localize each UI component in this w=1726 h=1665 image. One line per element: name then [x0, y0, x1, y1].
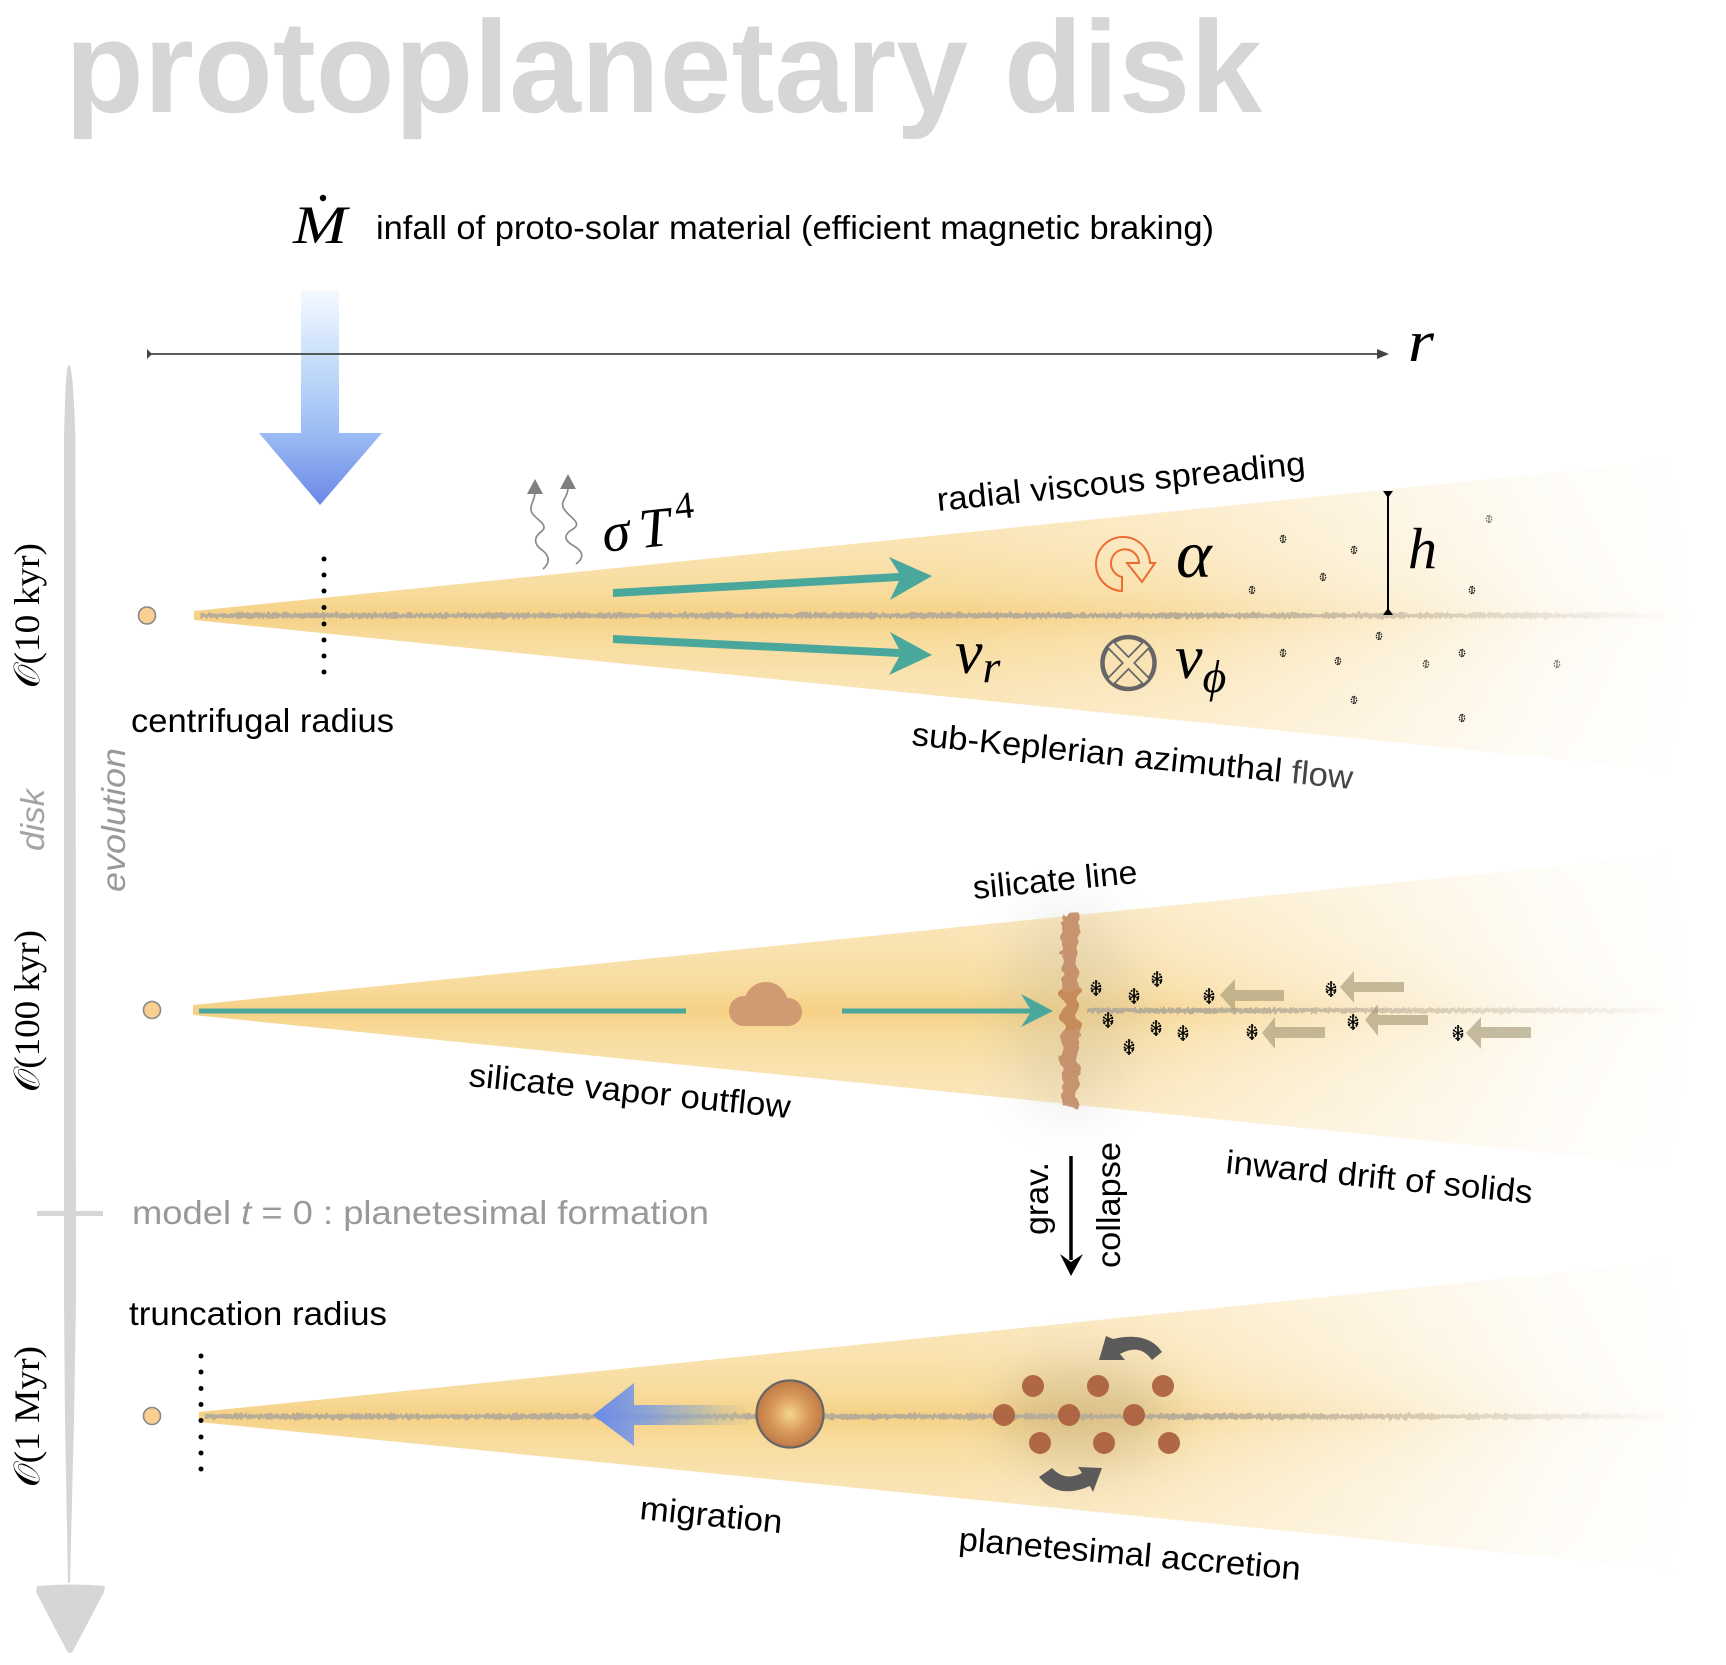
accretion halo	[1000, 1363, 1170, 1467]
label: silicate line: silicate line	[971, 853, 1139, 906]
heat radiation squiggles	[527, 474, 582, 569]
label: planetesimal accretion: planetesimal accretion	[957, 1520, 1302, 1587]
teal radial arrows	[613, 557, 932, 675]
label: collapse: collapse	[1090, 1142, 1127, 1268]
outflow arrow	[842, 994, 1053, 1027]
label: truncation radius: truncation radius	[129, 1295, 387, 1332]
label: disk: disk	[14, 787, 51, 851]
label: 1 Myr timescale: 𝒪(1 Myr)	[7, 1346, 47, 1487]
sigma T^4: σ	[599, 500, 635, 565]
arrow: blue infall arrow	[259, 290, 382, 505]
arrow: gravitational collapse	[1060, 1156, 1083, 1276]
symbol: alpha: α	[1176, 516, 1213, 592]
disk wedge 3	[199, 1275, 1621, 1556]
label: sub-Keplerian flow: sub-Keplerian azimuthal flow	[910, 715, 1355, 796]
scale height bar	[1383, 491, 1393, 615]
accretion rotation arrows	[1039, 1336, 1162, 1492]
label: grav.: grav.	[1018, 1162, 1055, 1235]
midplane 2	[1088, 1008, 1668, 1013]
label: centrifugal radius: centrifugal radius	[131, 702, 394, 739]
label: evolution: evolution	[95, 748, 132, 892]
planet	[756, 1380, 824, 1448]
label: radial viscous spreading: radial viscous spreading	[935, 444, 1307, 518]
symbol: mass infall rate: M	[292, 195, 351, 255]
star 2	[144, 1002, 160, 1018]
axis: radius	[147, 349, 1389, 359]
symbol: v phi: ϕ	[1203, 651, 1226, 702]
icon: vapor cloud	[729, 982, 802, 1026]
symbol: v r: v	[955, 619, 983, 687]
planetesimals	[993, 1375, 1180, 1454]
centrifugal radius dotted line	[322, 556, 326, 674]
panel: disk stage 1	[131, 444, 1726, 796]
midplane 1	[200, 613, 1670, 618]
label: silicate vapor outflow: silicate vapor outflow	[467, 1056, 793, 1125]
symbol: h: h	[1408, 516, 1437, 581]
symbol: v phi: v	[1175, 624, 1203, 692]
label: 100 kyr timescale: 𝒪(100 kyr)	[7, 930, 47, 1092]
icon: into-page flow	[1102, 637, 1154, 689]
symbol: v r: r	[983, 641, 1002, 692]
midplane 3	[205, 1414, 1670, 1419]
heading: infall description: infall of proto-solar material (efficient magnetic braking)	[376, 209, 1214, 246]
label: migration: migration	[638, 1489, 784, 1540]
arrow: disk evolution timeline	[36, 365, 105, 1653]
silicate vapor outflow line	[199, 1008, 686, 1014]
panel: disk stage 2	[144, 849, 1726, 1211]
label: 10 kyr timescale: 𝒪(10 kyr)	[7, 543, 47, 688]
silicate line halo	[1005, 905, 1135, 1115]
inward drift arrows	[1220, 971, 1531, 1049]
star 3	[144, 1408, 160, 1424]
label: inward drift of solids: inward drift of solids	[1224, 1143, 1534, 1211]
star 1	[138, 607, 156, 624]
arrow: migration	[593, 1383, 747, 1446]
dust particles	[1249, 515, 1560, 722]
truncation radius dotted line	[198, 1354, 204, 1472]
sigma T^4: T	[636, 496, 677, 561]
label: model t = 0: model t = 0 : planetesimal formation	[132, 1194, 709, 1231]
panel: disk stage 3	[142, 1275, 1659, 1580]
label: r: r	[1408, 309, 1434, 374]
sigma T^4: 4	[673, 484, 696, 528]
solids particles	[1091, 971, 1463, 1055]
disk wedge 2	[193, 868, 1622, 1152]
silicate line band	[1062, 913, 1078, 1108]
icon: turbulence swirl	[1096, 537, 1155, 591]
disk wedge 1	[194, 474, 1620, 756]
